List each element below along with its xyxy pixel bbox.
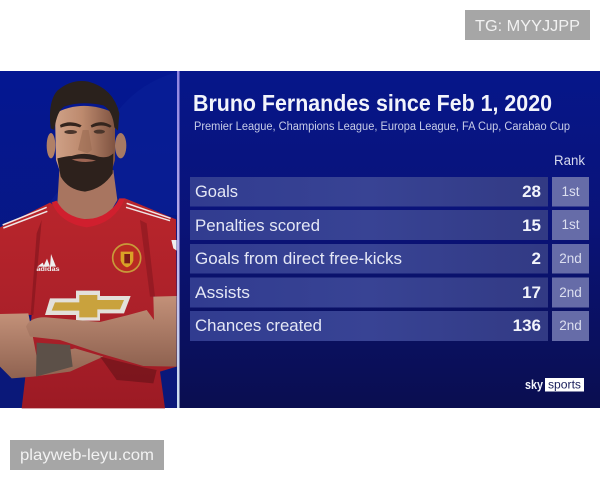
adidas logo: adidas xyxy=(36,266,60,273)
watermark: TG handle xyxy=(465,10,590,40)
row: chances created: Chances created xyxy=(195,317,322,335)
row: chances created xyxy=(190,311,589,341)
watermark: site name: playweb-leyu.com xyxy=(20,447,154,464)
row: penalties scored: 15 xyxy=(522,216,541,235)
sky sports logo xyxy=(525,377,584,392)
rank column heading: Rank xyxy=(554,153,585,168)
row: goals from direct free-kicks: Goals from direct free-kicks xyxy=(195,250,402,268)
row: goals from direct free-kicks: 2 xyxy=(532,249,541,268)
title: Bruno Fernandes since Feb 1, 2020 xyxy=(193,90,552,116)
collar xyxy=(52,198,125,227)
neck xyxy=(57,170,117,222)
watermark: TG handle: TG: MYYJJPP xyxy=(475,18,580,35)
beard xyxy=(57,153,113,192)
sky sports logo: sports xyxy=(548,380,581,392)
nose xyxy=(78,130,92,153)
shirt shadow below arms xyxy=(100,357,157,383)
panel: player background xyxy=(0,71,177,408)
row: assists: 2nd xyxy=(559,285,582,300)
row: goals: 1st xyxy=(561,184,580,199)
row: goals xyxy=(190,177,589,206)
row: assists xyxy=(190,278,589,308)
row: chances created: 2nd xyxy=(559,318,582,333)
row: penalties scored: Penalties scored xyxy=(195,217,320,235)
sleeve shadows xyxy=(31,220,42,315)
row: penalties scored: 1st xyxy=(561,217,580,232)
row: goals from direct free-kicks xyxy=(190,244,589,274)
adidas logo xyxy=(36,254,60,273)
divider line xyxy=(177,71,180,408)
hair xyxy=(50,81,119,131)
row: chances created: 136 xyxy=(513,316,541,335)
crossed arms xyxy=(0,296,177,378)
shirt xyxy=(0,198,177,408)
row: goals: 28 xyxy=(522,182,541,201)
row: assists: Assists xyxy=(195,284,250,302)
watermark: site name xyxy=(10,440,164,470)
row: goals: Goals xyxy=(195,183,238,201)
row: assists: 17 xyxy=(522,283,541,302)
sponsor logo xyxy=(45,291,131,321)
sky sports logo: sky xyxy=(525,377,544,392)
panel: graphic background xyxy=(0,71,600,408)
head xyxy=(47,81,126,192)
shoulder stripes xyxy=(3,203,171,228)
player photo illustration xyxy=(0,81,177,408)
subtitle: Premier League, Champions League, Europa League, FA Cup, Carabao Cup xyxy=(194,121,570,133)
sleeve badge xyxy=(171,240,177,251)
row: penalties scored xyxy=(190,210,589,240)
eyebrows xyxy=(60,122,82,128)
mouth xyxy=(72,159,96,162)
club crest xyxy=(113,244,141,272)
eyes xyxy=(64,130,77,134)
row: goals from direct free-kicks: 2nd xyxy=(559,251,582,266)
